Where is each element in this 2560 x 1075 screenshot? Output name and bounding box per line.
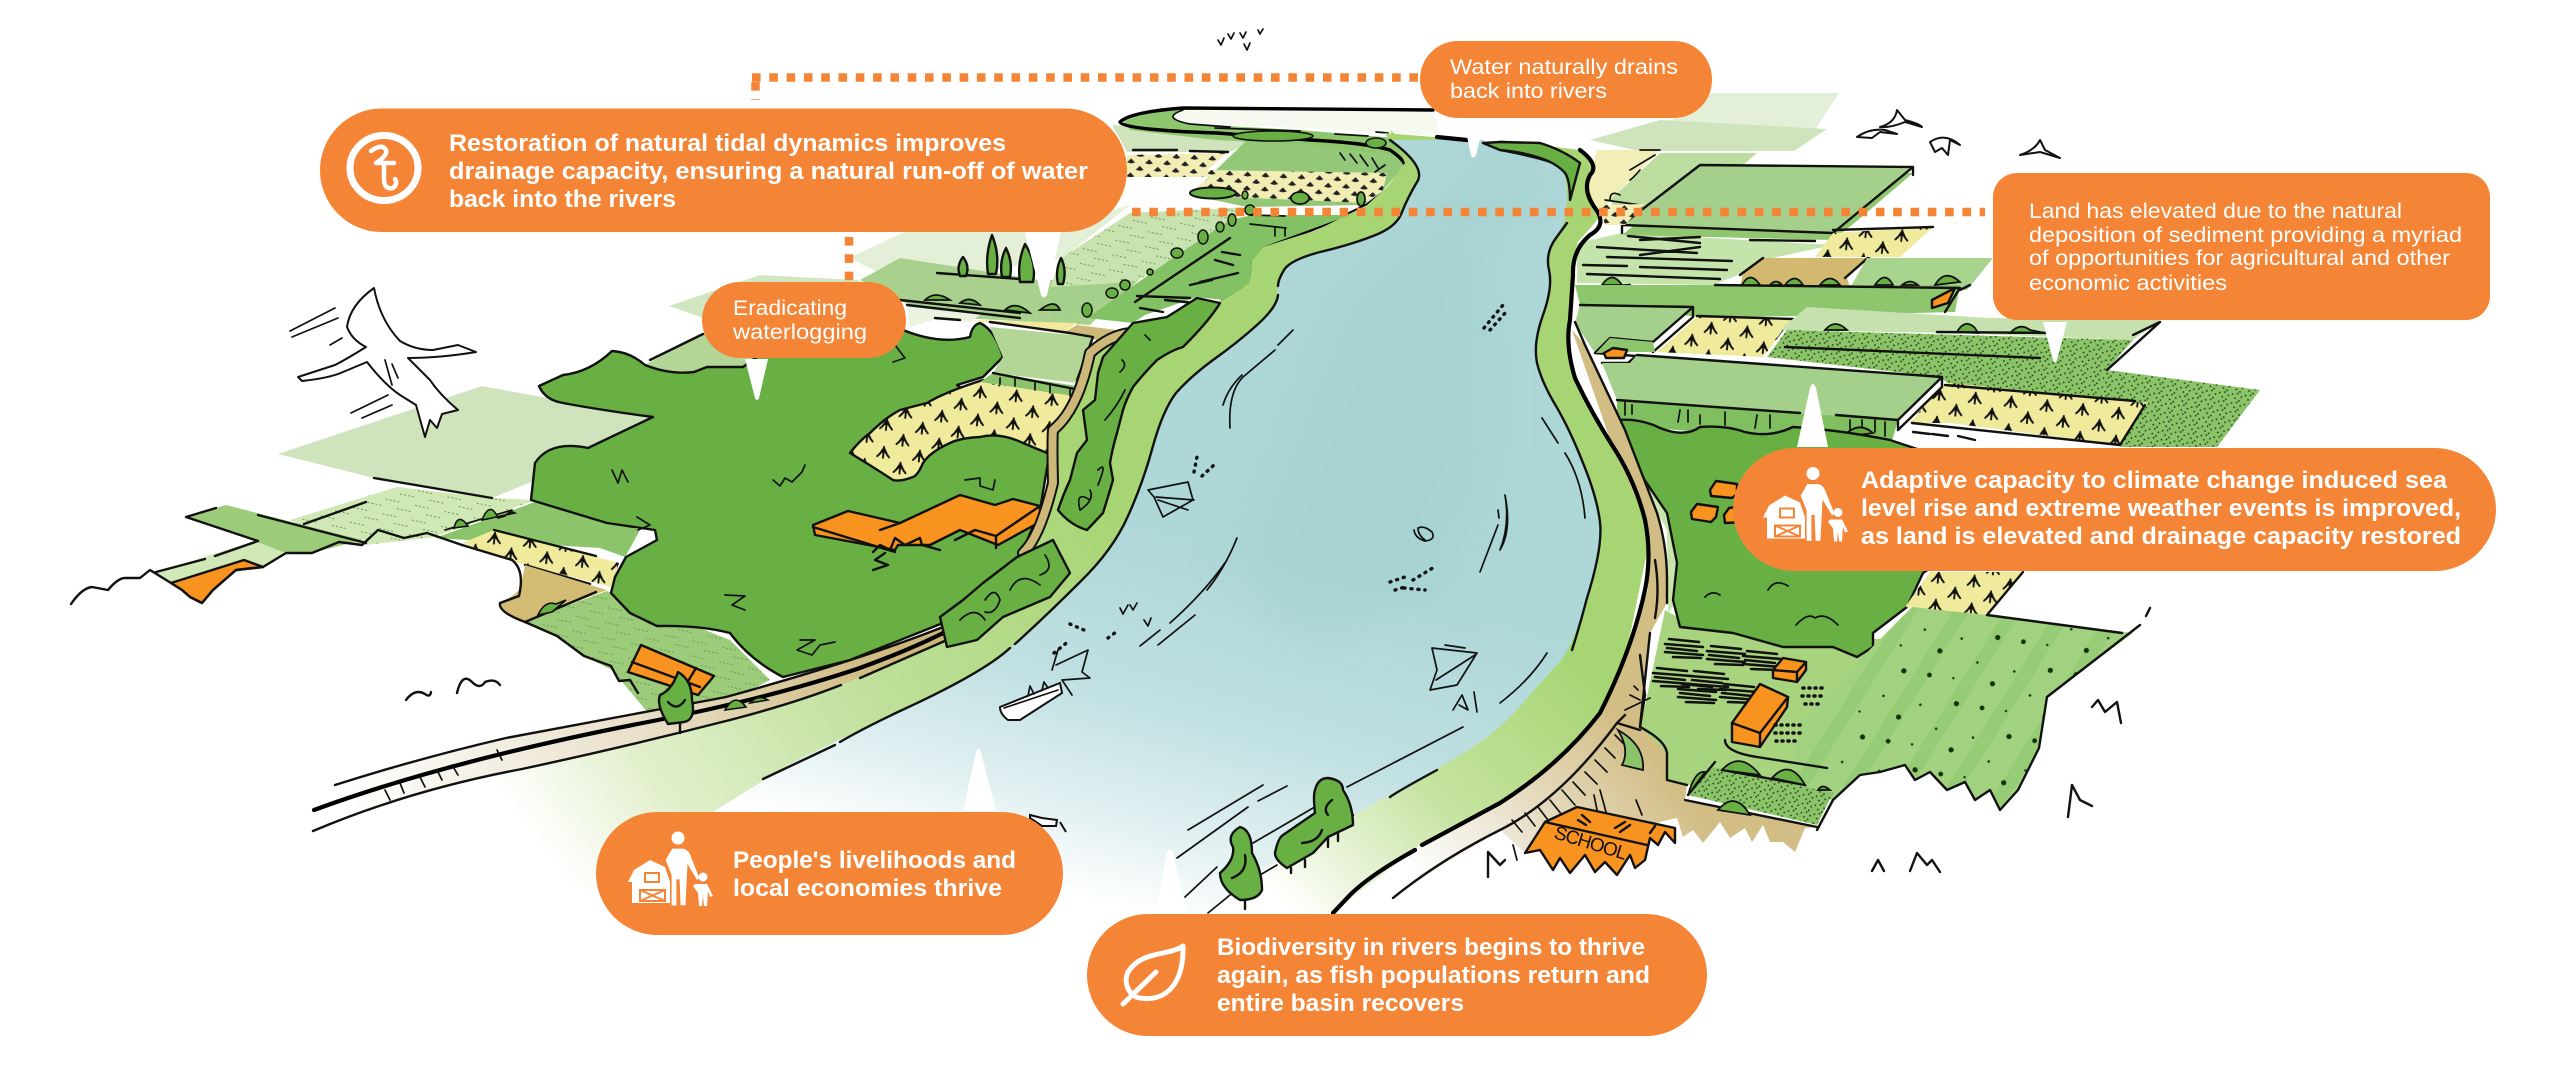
callout: tidal dynamics: Restoration of natural tidal dynamics improves	[449, 130, 1006, 157]
river	[713, 140, 1600, 908]
orange building, left field	[813, 495, 1040, 570]
callout: tidal dynamics: back into the rivers	[449, 186, 676, 213]
callout: land elevated: deposition of sediment providing a myriad	[2029, 223, 2462, 247]
striped crop field, lower right	[1790, 607, 2150, 810]
hedge bush, lower left bank	[940, 540, 1070, 647]
left river bank	[313, 130, 1440, 890]
callout: adaptive capacity: as land is elevated and drainage capacity restored	[1861, 523, 2461, 550]
callout: biodiversity: Biodiversity in rivers begins to thrive	[1217, 934, 1645, 961]
callout tails	[745, 118, 2067, 914]
callout: land elevated	[1993, 173, 2490, 320]
callout: livelihoods: People's livelihoods and	[733, 847, 1016, 874]
grass tufts and small orange huts, right field	[1691, 481, 1838, 625]
callout: eradicating waterlogging: waterlogging	[732, 320, 867, 344]
icon: tidal logo	[350, 136, 418, 200]
callout: adaptive capacity: Adaptive capacity to climate change induced sea	[1861, 467, 2447, 494]
callout: adaptive capacity	[1733, 448, 2496, 571]
fish shoals in the river	[1054, 305, 1506, 653]
icon: family and barn	[1763, 467, 1848, 542]
callout: water drains: Water naturally drains	[1450, 55, 1678, 79]
callout: eradicating waterlogging	[702, 282, 906, 358]
mid-green strip along left road, upper	[1082, 188, 1365, 323]
callout: livelihoods	[596, 812, 1063, 935]
callout: biodiversity: again, as fish populations return and	[1217, 962, 1650, 989]
upper left farmland: dotted fields	[1050, 140, 1405, 320]
top river loop with embankment	[1120, 108, 1440, 300]
orange building and tree, lower left	[628, 645, 714, 733]
pale background land layers, left top	[645, 125, 1270, 380]
right dark green field	[1617, 420, 2040, 657]
scattered grass marks, lower right	[1488, 700, 2121, 877]
tan and dotted field, lower left	[500, 560, 770, 720]
right road and school grounds	[1333, 150, 1817, 913]
school sign text: SCHOOL	[1552, 823, 1629, 865]
large dark green field, left	[531, 323, 1050, 677]
dolphin	[1030, 815, 1066, 832]
far left farmland strips	[71, 478, 640, 604]
callout: water drains: back into rivers	[1450, 79, 1607, 103]
crane in flight	[290, 288, 476, 437]
icon: family and barn, livelihoods	[628, 832, 713, 906]
hedged dotted plot, lower right	[1685, 761, 1833, 830]
small birds, left sky	[406, 679, 500, 700]
icon: leaf	[1123, 946, 1183, 1004]
field and track near left road top	[907, 305, 1117, 397]
orchard inside left green field	[850, 380, 1080, 481]
right bank: farm fields, upper	[1575, 305, 2260, 448]
callout: biodiversity: entire basin recovers	[1217, 990, 1464, 1017]
treeline row, upper left	[900, 235, 1065, 313]
callout: eradicating waterlogging: Eradicating	[733, 296, 847, 320]
callout: land elevated: economic activities	[2029, 271, 2227, 295]
fishing nets	[1052, 482, 1477, 712]
right bank: lower field base	[1617, 420, 1987, 795]
birds, upper right sky	[1857, 110, 2060, 158]
grass tufts in left field	[612, 345, 995, 655]
school building	[1525, 807, 1675, 875]
callout: land elevated: Land has elevated due to the natural	[2029, 199, 2402, 223]
river bank outlines and water ripple lines	[763, 137, 1600, 913]
top river edge strip	[1385, 133, 1482, 150]
dotted connector lines	[752, 78, 1985, 282]
callout: water drains	[1420, 41, 1712, 118]
hedge bush, upper left bank	[1058, 298, 1220, 530]
yellow orchard, lower right	[1905, 572, 2023, 615]
callout: land elevated: of opportunities for agricultural and other	[2029, 246, 2450, 270]
riverside trees, bottom	[1220, 778, 1353, 909]
boat	[1000, 682, 1062, 720]
right bank: green band and hedges	[1575, 258, 1993, 318]
birds, upper sky	[1218, 29, 1263, 50]
callout: adaptive capacity: level rise and extreme weather events is improved,	[1861, 495, 2461, 522]
right bank: top land layers	[1577, 93, 1933, 287]
callout: tidal dynamics: drainage capacity, ensuring a natural run-off of water	[449, 158, 1088, 185]
callout: tidal dynamics	[320, 108, 1127, 232]
left road	[313, 627, 947, 831]
black crop beds and orange barns, lower right	[1653, 639, 1827, 768]
callout: livelihoods: local economies thrive	[733, 875, 1002, 902]
small bushes below left road	[725, 698, 768, 710]
left road northern section	[1023, 333, 1130, 553]
callout: biodiversity	[1087, 914, 1707, 1036]
orchard, left lower	[462, 530, 619, 587]
pale parallelogram field, far left	[278, 386, 655, 498]
right bush at river head	[1483, 142, 1580, 200]
right river bank	[1207, 140, 1648, 913]
